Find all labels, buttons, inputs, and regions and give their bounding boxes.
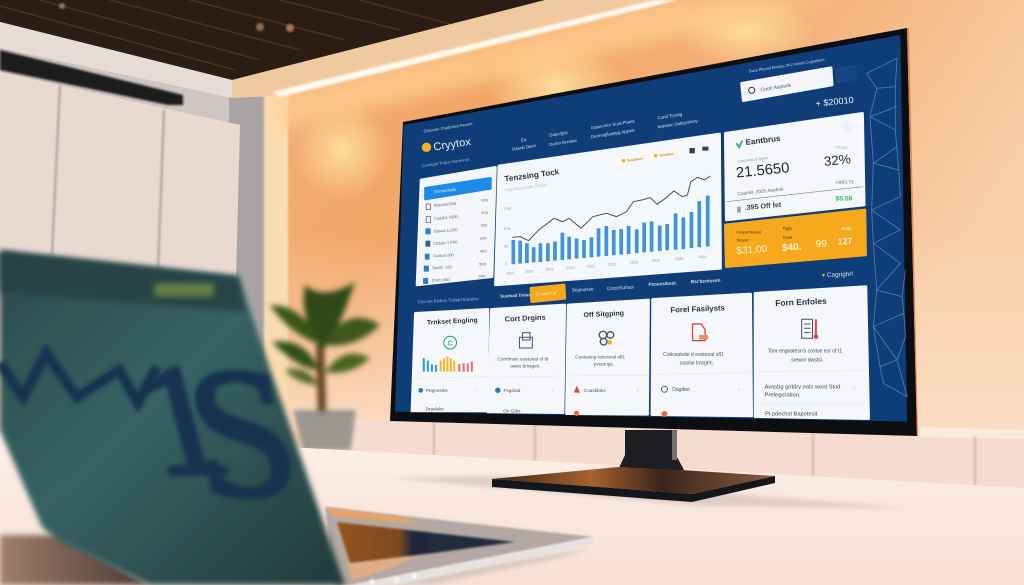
card: Off Sitgping: › [637, 388, 639, 394]
card: Trakset Engling: Pegnssles [426, 388, 448, 393]
earnings panel: Deucutrad 4 Btspe [737, 156, 768, 164]
sidebar panel: Cous01 4200 [434, 214, 459, 221]
sidebar panel: 500 [479, 274, 486, 279]
logo: Conrigrit Pritun Svrevros [422, 157, 470, 168]
card: Trakset Engling [412, 309, 488, 412]
axis labels: 2021 [566, 266, 575, 270]
trading chart panel: Tsuy Rasonsoth Chipos [504, 182, 547, 193]
top navigation links: Chinoser Ctadrnlsot Pewnrt [423, 121, 474, 134]
card: Forel Fasilysts: Dagibet [672, 387, 690, 393]
card: Off Sitgping: pvostugs. [594, 362, 614, 367]
card: Forn Enfoles: Tonr engoatesn's costoe ecr of t1 [768, 349, 842, 355]
lower tabs [418, 278, 721, 304]
monitor edge highlight [907, 28, 918, 436]
logo [422, 136, 472, 168]
card: Cost Drgins: › [552, 388, 554, 394]
sidebar panel: 400 [480, 249, 487, 254]
card: Forn Enfoles: srewor dwstsl. [791, 357, 823, 363]
back wall [230, 0, 1024, 430]
blurred screen lettering: S [173, 331, 312, 536]
monitor [390, 28, 918, 436]
logo: Cryytox [433, 136, 472, 154]
earnings panel: A&63.73 [835, 179, 854, 184]
blurred screen lettering: 1 [119, 332, 245, 507]
earnings panel: .395 Off fet [744, 202, 782, 212]
wainscot panels [350, 420, 1024, 490]
chart filters [621, 147, 708, 164]
sidebar panel: Bascrits/208 [434, 201, 457, 208]
sidebar panel: Drsrb 550 [432, 277, 450, 283]
chart tabs: Dasnb Dace [512, 143, 537, 152]
trading chart panel [495, 134, 721, 285]
search button [835, 64, 857, 83]
axis labels: 0 [505, 262, 507, 266]
laptop [0, 250, 594, 585]
top navigation links [423, 57, 825, 134]
axis labels: 2321 [587, 264, 595, 268]
card: Forn Enfoles: Avosbg gntdry eats wont Stod [765, 385, 840, 391]
earnings panel: $5.59 [835, 196, 853, 203]
sidebar panel: 000 [481, 198, 489, 203]
card: Cost Drgins: oweo bmsgen. [510, 363, 541, 368]
axis labels: 2021 [545, 268, 554, 272]
yellow stats panel: $40. [782, 242, 802, 254]
card: Off Sitgping: Coastibles [584, 388, 606, 393]
chart tabs [512, 111, 699, 152]
left wall backing [0, 0, 232, 300]
card: Forn Enfoles [755, 287, 869, 419]
sidebar panel: Drsnnotsde [433, 187, 457, 194]
yellow stats panel: Coyal [783, 235, 792, 239]
search box [742, 68, 832, 101]
axis labels: 2023 [630, 260, 638, 264]
yellow stats panel: 99. [815, 238, 830, 250]
chart filters: Sxsannsor [627, 156, 644, 163]
chart filters: Dznot/tac [659, 152, 674, 158]
axis labels: 2022 [652, 259, 660, 263]
earnings panel: 32% [823, 151, 852, 169]
wall corner column and lit strip [229, 95, 288, 427]
sidebar panel: 200 [481, 223, 488, 228]
card: Cost Drgins: Cort Drgins [505, 313, 546, 324]
chart tabs: Ea [521, 137, 527, 143]
yellow stats panel: Pggly [783, 226, 792, 230]
earnings panel: 21.5650 [735, 160, 790, 182]
card: Cost Drgins: Comfmsin eostonal of t8 [497, 357, 549, 362]
axis labels: P00 [504, 227, 511, 231]
earnings panel [725, 113, 864, 220]
yellow stats panel: $31,00 [736, 244, 768, 257]
left white cabinets [0, 50, 240, 280]
sidebar panel: Toseb -120 [432, 264, 453, 270]
yellow stats panel: Strontd [736, 239, 748, 243]
yellow stats panel: 127 [837, 236, 853, 247]
ceiling soffit and LED strip [0, 0, 835, 130]
balance value: + $20010 [815, 95, 854, 109]
lower tabs: Coccon Etckos Trotlarf Estrelss [418, 296, 479, 304]
card: Forel Fasilysts: osarial Imsgen. [680, 360, 714, 366]
chart tabs: Durso Bunase [549, 138, 578, 147]
chart tabs: Durmngflusttpg Appsst [590, 127, 636, 139]
trend line [512, 176, 710, 241]
axis labels [504, 207, 707, 275]
yellow stats panel: Frrnpot Rotons [736, 230, 761, 234]
card: Forn Enfoles: Prefegoration. [765, 393, 801, 399]
chart tabs: Dapu/gist [549, 130, 569, 138]
card: Off Sitgping: Contesing retensral ofl1 [575, 354, 625, 359]
lower tabs: Cscsn lr st [536, 290, 557, 297]
desk surface [0, 432, 1024, 585]
laptop base and keyboard [325, 507, 594, 585]
card: Forel Fasilysts [652, 294, 752, 417]
copyright link: ▾ Cagrighrl [822, 271, 853, 279]
earnings panel: Eantbrus [745, 134, 782, 147]
card: Trakset Engling: Trnkset Engling [427, 317, 478, 327]
sidebar panel: 500 [479, 262, 487, 267]
card: Forel Fasilysts: Forel Fasilysts [670, 303, 725, 315]
card: Forn Enfoles: Forn Enfoles [775, 296, 827, 308]
axis labels: 2020 [675, 257, 683, 261]
sidebar panel: 100 [481, 210, 489, 215]
dashboard screen [395, 35, 907, 422]
blurred screen chart line [0, 353, 157, 403]
monitor stand shadow on desk [390, 476, 910, 508]
sidebar panel [417, 167, 495, 285]
top navigation links: Swut Pkonid Brodes 2KZ Amutt Cupyrlines [748, 57, 825, 74]
sidebar panel: Chaslo 1 P00 [433, 239, 458, 246]
card: Cost Drgins [488, 305, 565, 414]
card: Forel Fasilysts: › [738, 387, 740, 393]
lower tabs: Bsr'bcotsssn [691, 278, 721, 284]
potted plant [270, 282, 380, 450]
card: Forn Enfoles: › [853, 383, 856, 392]
monitor stand [492, 430, 775, 502]
bar series [513, 196, 708, 264]
search box: Coot/ Aspisok [760, 83, 792, 93]
chart tabs: Gasnt-Gor Suut-Pluets [590, 118, 636, 130]
lower tabs: Pzoscs/bsst [648, 281, 676, 287]
axis labels: 2020 [525, 269, 533, 273]
card: Off Sitgping: Off Sitgping [583, 310, 624, 319]
chart tabs: Cund Trustig [657, 111, 683, 120]
sidebar panel: 200 [480, 235, 487, 240]
card: Off Sitgping [566, 300, 649, 416]
lower tabs: Suotsad Dstas [500, 292, 531, 299]
earnings panel: Coamis: 2005 Anpfrok [737, 187, 784, 196]
sidebar panel: Dasod Lc200 [434, 227, 459, 234]
card: Cost Drgins: Fsgstad [504, 388, 521, 393]
chart tabs: Iwasasc Dat/pyslway [657, 118, 699, 129]
lid toolbar [0, 252, 245, 312]
yellow stats panel: 9A6K [841, 226, 852, 231]
card: Trakset Engling: C [447, 338, 454, 347]
card: Trakset Engling: Dravlsks [425, 407, 444, 412]
lower tabs: Scgnulsse [572, 287, 594, 293]
lower tabs: Cocp/Suhsot [607, 285, 635, 291]
sidebar panel: Cuskdr s00 [433, 252, 455, 258]
network mesh decoration [867, 58, 907, 397]
axis labels: 1914 [698, 255, 707, 259]
card: Forel Fasilysts: Coticeaisde d eostonal ofl1 [663, 352, 724, 358]
axis labels: P00 [504, 207, 511, 211]
card: Forn Enfoles: Pi pdechst Bapotesit [765, 411, 818, 417]
axis labels: 50 [504, 244, 508, 248]
wood ceiling [0, 0, 545, 80]
trading chart panel: Tenzsing Tock [504, 167, 560, 184]
axis labels: 2021 [608, 262, 617, 266]
reflection beneath laptop [0, 535, 150, 585]
laptop lid [0, 250, 345, 585]
yellow stats panel [725, 210, 866, 267]
card: Cost Drgins: On Gtks [503, 409, 521, 414]
axis labels: Mon [507, 271, 514, 275]
earnings panel: Prupa [836, 144, 848, 149]
monitor frame [390, 28, 917, 436]
card: Trakset Engling: › [476, 388, 478, 394]
screen background [395, 35, 907, 422]
